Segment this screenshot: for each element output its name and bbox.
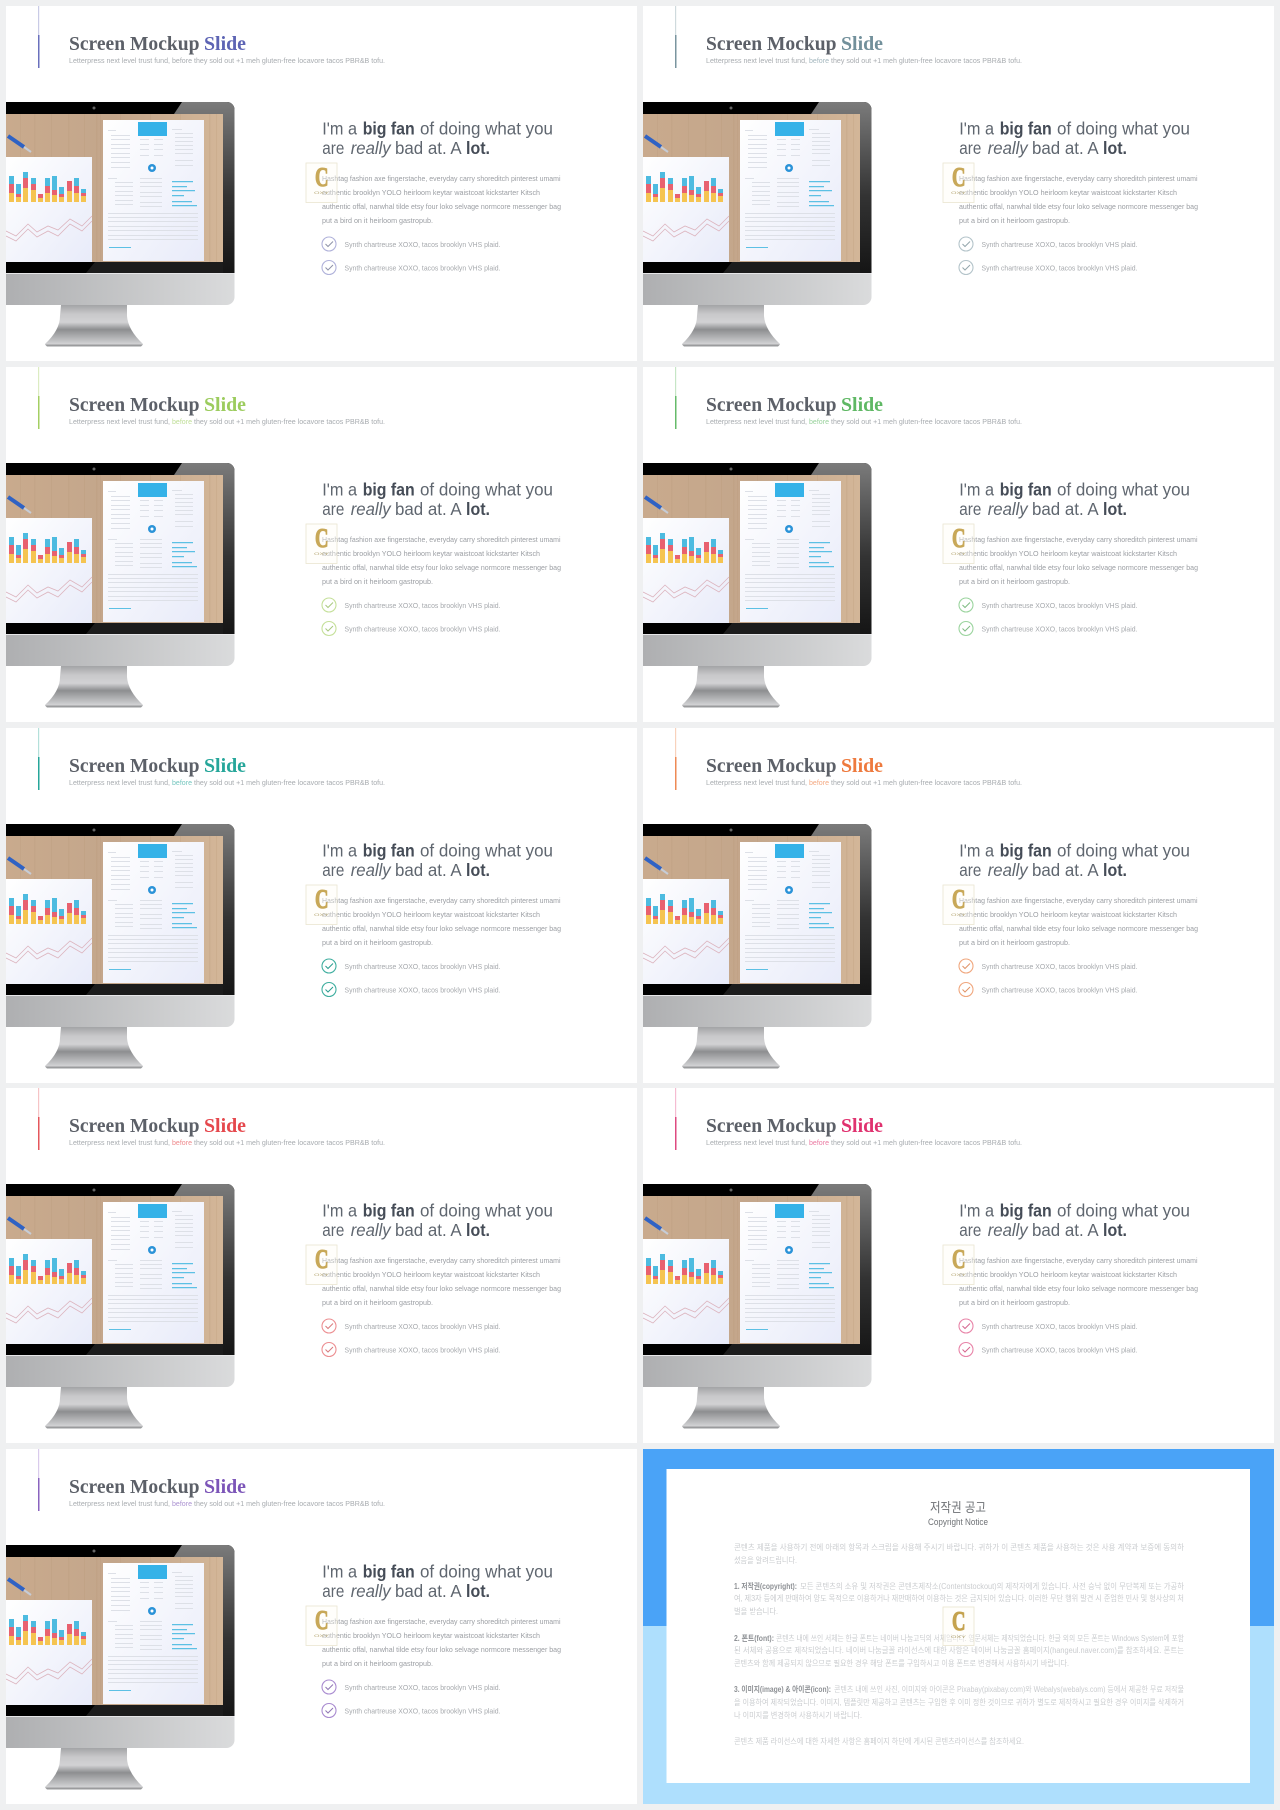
heading: bad at. A [1032,138,1099,158]
heading: lot. [466,138,490,158]
watermark logo: C [315,162,328,192]
heading [322,1562,553,1601]
accent bar [38,6,40,68]
watermark logo: OXY [314,190,330,195]
heading: really [351,860,392,880]
subtitle [69,1138,385,1147]
body text [959,896,1198,946]
body text: authentic brooklyn YOLO heirloom keytar waistcoat kickstarter Kitsch [959,1270,1177,1279]
closing line: 콘텐츠 제품 라이선스에 대한 자세한 사항은 홈페이지 하단에 게시된 콘텐츠라이선스를 참조하세요. [734,1736,1024,1746]
body text [322,1617,561,1668]
title: Slide [841,754,883,776]
panel: slide 5 teal [6,728,637,1083]
watermark logo [943,523,974,563]
title: Screen Mockup [706,754,836,776]
section 3 image and icon [734,1684,1184,1720]
intro paragraph [734,1542,1185,1565]
heading: I'm a [959,118,994,138]
heading: of doing what you [1057,840,1190,860]
title: Screen Mockup [69,33,200,55]
check item 1: Synth chartreuse XOXO, tacos brooklyn VHS plaid. [982,601,1138,610]
subtitle: Letterpress next level trust fund, [69,417,170,426]
accent bar [38,367,40,429]
subtitle: they sold out +1 meh gluten-free locavore tacos PBR&B tofu. [831,417,1022,426]
heading: are [959,138,981,158]
body text: Hashtag fashion axe fingerstache, everyday carry shoreditch pinterest umami [322,1617,561,1626]
heading: lot. [1103,499,1127,519]
watermark logo [943,162,974,202]
heading: bad at. A [1032,1220,1099,1240]
body text: authentic offal, narwhal tilde etsy four loko selvage normcore messenger bag [322,563,561,572]
heading: really [351,1220,392,1240]
check item 1 [959,1319,1138,1333]
heading [322,1201,553,1240]
watermark logo: OXY [314,1633,330,1638]
subtitle: they sold out +1 meh gluten-free locavore tacos PBR&B tofu. [194,1499,385,1508]
watermark logo: C [315,1244,328,1274]
body text: authentic brooklyn YOLO heirloom keytar waistcoat kickstarter Kitsch [322,910,540,918]
section 1 copyright: 벌을 받습니다. [734,1606,778,1616]
monitor mockup [643,102,872,346]
section 3 image and icon: 3. 이미지(image) & 아이콘(icon): [734,1684,831,1694]
title: Slide [204,33,246,55]
check item 1 [959,598,1138,612]
heading: are [322,1220,344,1240]
heading: I'm a [959,479,994,499]
section 3 image and icon: 을 이용하여 제작되었습니다. 이미지, 템플릿만 제공하고 콘텐츠는 구입한 후 이미 정한 것이므로 귀하가 별도로 제작하시고 필요한 경우 이미지를 삭제하거 [734,1697,1184,1707]
body text: put a bird on it heirloom gastropub. [959,1298,1070,1307]
heading: I'm a [959,1201,994,1221]
body text: authentic brooklyn YOLO heirloom keytar waistcoat kickstarter Kitsch [322,1270,540,1279]
subtitle: before [809,417,829,426]
body text [322,174,561,225]
heading: lot. [466,499,490,519]
heading: big fan [363,1562,415,1582]
heading: of doing what you [1057,1201,1190,1221]
check item 1: Synth chartreuse XOXO, tacos brooklyn VHS plaid. [344,1322,500,1331]
monitor mockup [6,1545,234,1790]
watermark logo: C [315,523,328,553]
title: Slide [841,394,883,416]
copyright title [928,1500,988,1527]
body text: put a bird on it heirloom gastropub. [959,216,1070,225]
watermark logo: C [952,523,966,553]
heading: really [988,499,1029,519]
heading: big fan [363,840,415,860]
subtitle [69,1499,385,1508]
watermark logo: OXY [951,190,967,195]
accent bar [675,6,676,68]
monitor mockup [643,824,872,1068]
heading: bad at. A [395,138,462,158]
section 3 image and icon: 나 이미지를 변경하여 사용하시기 바랍니다. [734,1710,862,1720]
subtitle: Letterpress next level trust fund, [706,417,807,426]
watermark logo: C [952,162,966,192]
body text [959,1256,1198,1307]
subtitle [706,778,1022,786]
title: Screen Mockup [706,33,836,55]
section 2 font [734,1633,1185,1668]
watermark logo [306,1244,337,1285]
body text: put a bird on it heirloom gastropub. [322,938,433,946]
title: Slide [204,1115,246,1137]
watermark logo [943,884,974,924]
accent bar [675,1088,676,1150]
monitor mockup [6,102,234,346]
monitor mockup [643,1184,872,1429]
subtitle: before [809,778,829,786]
check item 2 [959,982,1138,996]
body text: Hashtag fashion axe fingerstache, everyday carry shoreditch pinterest umami [322,174,561,183]
subtitle: before [172,417,192,426]
section 1 copyright: 1. 저작권(copyright): [734,1581,797,1591]
heading: are [322,499,344,519]
heading: are [322,860,344,880]
heading: lot. [1103,860,1127,880]
check item 1 [959,237,1138,251]
accent bar [675,728,676,790]
body text: Hashtag fashion axe fingerstache, everyday carry shoreditch pinterest umami [959,1256,1198,1265]
body text: authentic brooklyn YOLO heirloom keytar waistcoat kickstarter Kitsch [322,188,540,197]
subtitle: they sold out +1 meh gluten-free locavore tacos PBR&B tofu. [194,778,385,786]
check item 2: Synth chartreuse XOXO, tacos brooklyn VHS plaid. [982,264,1138,272]
watermark logo: OXY [314,551,330,556]
check item 2 [322,621,500,635]
watermark logo: C [315,1605,328,1635]
panel: slide 9 purple [6,1449,637,1804]
copyright title: Copyright Notice [928,1517,988,1527]
subtitle: before [172,56,192,65]
check item 1 [322,598,500,612]
subtitle: before [172,778,192,786]
check item 1 [322,958,500,972]
monitor mockup [6,824,234,1068]
accent bar [38,728,40,790]
heading: bad at. A [395,499,462,519]
heading: big fan [1000,840,1052,860]
subtitle: before [809,56,829,65]
body text [322,1256,561,1307]
body text: authentic offal, narwhal tilde etsy four loko selvage normcore messenger bag [322,1645,561,1654]
section 2 font: 2. 폰트(font): [734,1634,774,1643]
check item 2: Synth chartreuse XOXO, tacos brooklyn VHS plaid. [982,1346,1138,1355]
watermark logo: C [315,884,328,914]
section 3 image and icon: 콘텐츠 내에 쓰인 사진, 이미지와 아이콘은 Pixabay(pixabay.com)와 Webalys(webalys.com) 등에서 제공한 무료 저작물 [834,1684,1184,1694]
body text: authentic offal, narwhal tilde etsy four loko selvage normcore messenger bag [959,1284,1198,1293]
body text: Hashtag fashion axe fingerstache, everyday carry shoreditch pinterest umami [322,535,561,544]
title: Screen Mockup [706,1115,836,1137]
subtitle [706,417,1022,426]
title: Screen Mockup [69,1476,200,1498]
heading: of doing what you [420,479,553,499]
subtitle [69,778,385,786]
section 2 font: 된 서체와 공용으로 제작되었습니다. 네이버 나눔글꼴 라이선스에 대한 사항은 네이버 나눔글꼴 홈페이지(hangeul.naver.com)를 참조하세요. 폰트는 [734,1645,1184,1655]
subtitle: Letterpress next level trust fund, [69,778,170,786]
heading: lot. [1103,138,1127,158]
subtitle: Letterpress next level trust fund, [69,56,170,65]
subtitle: before [172,1499,192,1508]
title: Slide [841,33,883,55]
heading: of doing what you [420,1201,553,1221]
heading: big fan [1000,1201,1052,1221]
body text [322,535,561,586]
heading: of doing what you [1057,479,1190,499]
body text: authentic offal, narwhal tilde etsy four loko selvage normcore messenger bag [322,924,561,932]
heading: I'm a [322,840,357,860]
panel: slide 1 indigo [6,6,637,361]
monitor mockup [6,463,234,707]
heading [959,1201,1190,1240]
subtitle: they sold out +1 meh gluten-free locavore tacos PBR&B tofu. [831,56,1022,65]
watermark logo: C [952,1244,966,1274]
accent bar [38,1449,40,1511]
section 2 font: 콘텐츠와 함께 제공되지 않으므로 필요한 경우 해당 폰트를 구입하시고 이용 폰트로 변경해서 사용하시기 바랍니다. [734,1658,1069,1668]
body text: authentic offal, narwhal tilde etsy four loko selvage normcore messenger bag [322,1284,561,1293]
heading: are [959,860,981,880]
check item 2 [959,1343,1138,1357]
title: Screen Mockup [69,1115,200,1137]
check item 1: Synth chartreuse XOXO, tacos brooklyn VHS plaid. [344,240,500,249]
subtitle: they sold out +1 meh gluten-free locavore tacos PBR&B tofu. [194,417,385,426]
heading: really [988,860,1029,880]
heading: lot. [466,1220,490,1240]
check item 2 [322,1704,500,1718]
subtitle: Letterpress next level trust fund, [706,778,807,786]
check item 1 [322,237,500,251]
heading: are [322,138,344,158]
watermark logo: OXY [951,912,967,916]
check item 2: Synth chartreuse XOXO, tacos brooklyn VHS plaid. [344,1706,500,1716]
heading: bad at. A [395,860,462,880]
heading: bad at. A [395,1581,462,1601]
heading [322,479,553,519]
watermark logo [306,523,337,563]
heading: big fan [363,479,415,499]
section 2 font: 콘텐츠 내에 쓰인 서체는 한글 폰트는 네이버 나눔고딕의 서체입니다. 영문서체는 제작되었습니다. 한글 외의 모든 폰트는 Windows System에 포함 [776,1633,1185,1643]
title: Screen Mockup [706,394,836,416]
heading: lot. [466,860,490,880]
heading: really [351,138,392,158]
title: Slide [204,1476,246,1498]
check item 1: Synth chartreuse XOXO, tacos brooklyn VHS plaid. [344,1683,500,1692]
heading: big fan [363,118,415,138]
panel: slide 2 blue-grey [643,6,1274,361]
body text: authentic brooklyn YOLO heirloom keytar waistcoat kickstarter Kitsch [959,910,1177,918]
subtitle: they sold out +1 meh gluten-free locavore tacos PBR&B tofu. [194,1138,385,1147]
panel: copyright notice [643,1449,1274,1804]
monitor mockup [6,1184,234,1429]
title: Screen Mockup [69,394,200,416]
heading: I'm a [322,1201,357,1221]
heading: I'm a [322,118,357,138]
check item 2 [959,621,1138,635]
check item 2: Synth chartreuse XOXO, tacos brooklyn VHS plaid. [982,624,1138,633]
heading: I'm a [322,1562,357,1582]
body text: put a bird on it heirloom gastropub. [322,1659,433,1668]
check item 1 [322,1319,500,1333]
intro paragraph: 콘텐츠 제품을 사용하기 전에 아래의 항목과 스크립을 사용해 주시기 바랍니다. 귀하가 이 콘텐츠 제품을 사용하는 것은 사용 계약과 보증에 동의하 [734,1542,1185,1552]
heading: really [988,1220,1029,1240]
subtitle: Letterpress next level trust fund, [706,1138,807,1147]
body text: put a bird on it heirloom gastropub. [959,938,1070,946]
subtitle: they sold out +1 meh gluten-free locavore tacos PBR&B tofu. [831,778,1022,786]
heading [959,840,1190,880]
body text: Hashtag fashion axe fingerstache, everyday carry shoreditch pinterest umami [959,896,1198,904]
title: Slide [841,1115,883,1137]
watermark logo: OXY [314,1272,330,1277]
subtitle: before [809,1138,829,1147]
check item 2: Synth chartreuse XOXO, tacos brooklyn VHS plaid. [982,985,1138,994]
subtitle: Letterpress next level trust fund, [706,56,807,65]
panel: slide 8 pink [643,1088,1274,1443]
watermark logo: OXY [951,1272,967,1277]
body text: put a bird on it heirloom gastropub. [322,1298,433,1307]
check item 2 [322,1343,500,1357]
body text: Hashtag fashion axe fingerstache, everyday carry shoreditch pinterest umami [959,174,1198,183]
heading: of doing what you [420,118,553,138]
check item 2: Synth chartreuse XOXO, tacos brooklyn VHS plaid. [344,264,500,272]
panel: slide 6 orange [643,728,1274,1083]
panel: slide 7 red [6,1088,637,1443]
heading: of doing what you [1057,118,1190,138]
check item 2 [322,260,500,274]
watermark logo: OXY [951,1634,967,1639]
intro paragraph: 셨음을 알려드립니다. [734,1555,797,1565]
heading: of doing what you [420,840,553,860]
body text: authentic brooklyn YOLO heirloom keytar waistcoat kickstarter Kitsch [959,549,1177,558]
panel: slide 4 green [643,367,1274,722]
watermark logo [306,1605,337,1646]
body text: authentic offal, narwhal tilde etsy four loko selvage normcore messenger bag [959,563,1198,572]
body text: Hashtag fashion axe fingerstache, everyday carry shoreditch pinterest umami [959,535,1198,544]
heading: really [988,138,1029,158]
check item 1: Synth chartreuse XOXO, tacos brooklyn VHS plaid. [982,962,1138,970]
heading: bad at. A [1032,860,1099,880]
subtitle: they sold out +1 meh gluten-free locavore tacos PBR&B tofu. [194,56,385,65]
body text: put a bird on it heirloom gastropub. [322,577,433,586]
heading: lot. [466,1581,490,1601]
check item 1 [959,958,1138,972]
heading: really [351,1581,392,1601]
section 1 copyright: 모든 콘텐츠의 소유 및 저작권은 콘텐츠제작소(Contentstockout)의 제작자에게 있습니다. 사전 승낙 없이 무단복제 또는 가공하 [800,1581,1185,1591]
subtitle: Letterpress next level trust fund, [69,1499,170,1508]
heading [959,118,1190,158]
title: Screen Mockup [69,754,200,776]
heading: I'm a [959,840,994,860]
watermark logo: OXY [951,551,967,556]
watermark logo: OXY [314,912,330,916]
monitor mockup [643,463,872,707]
watermark logo [306,162,337,202]
body text: Hashtag fashion axe fingerstache, everyday carry shoreditch pinterest umami [322,1256,561,1265]
accent bar [38,1088,40,1150]
panel: slide 3 lime [6,367,637,722]
heading: bad at. A [1032,499,1099,519]
heading: big fan [363,1201,415,1221]
body text: authentic brooklyn YOLO heirloom keytar waistcoat kickstarter Kitsch [322,549,540,558]
copyright title: 저작권 공고 [930,1500,986,1515]
subtitle: they sold out +1 meh gluten-free locavore tacos PBR&B tofu. [831,1138,1022,1147]
subtitle [69,56,385,65]
heading: big fan [1000,118,1052,138]
check item 2: Synth chartreuse XOXO, tacos brooklyn VHS plaid. [344,985,500,994]
watermark logo [306,884,337,924]
heading [322,118,553,158]
subtitle: before [172,1138,192,1147]
check item 1: Synth chartreuse XOXO, tacos brooklyn VHS plaid. [982,240,1138,249]
check item 1: Synth chartreuse XOXO, tacos brooklyn VHS plaid. [344,601,500,610]
heading [959,479,1190,519]
check item 2 [322,982,500,996]
body text: authentic brooklyn YOLO heirloom keytar waistcoat kickstarter Kitsch [322,1631,540,1640]
title: Slide [204,754,246,776]
section 1 copyright [734,1581,1185,1616]
body text: authentic brooklyn YOLO heirloom keytar waistcoat kickstarter Kitsch [959,188,1177,197]
check item 2 [959,260,1138,274]
body text: authentic offal, narwhal tilde etsy four loko selvage normcore messenger bag [959,924,1198,932]
body text [959,174,1198,225]
heading: are [322,1581,344,1601]
subtitle [706,1138,1022,1147]
body text: put a bird on it heirloom gastropub. [322,216,433,225]
check item 2: Synth chartreuse XOXO, tacos brooklyn VHS plaid. [344,624,500,633]
body text: put a bird on it heirloom gastropub. [959,577,1070,586]
accent bar [675,367,676,429]
heading [322,840,553,880]
check item 1: Synth chartreuse XOXO, tacos brooklyn VHS plaid. [344,962,500,970]
watermark logo [943,1606,974,1646]
heading: big fan [1000,479,1052,499]
body text: authentic offal, narwhal tilde etsy four loko selvage normcore messenger bag [959,202,1198,211]
body text: Hashtag fashion axe fingerstache, everyday carry shoreditch pinterest umami [322,896,561,904]
title: Slide [204,394,246,416]
watermark logo: C [952,884,966,914]
heading: are [959,499,981,519]
watermark logo [943,1244,974,1285]
check item 1 [322,1680,500,1694]
heading: I'm a [322,479,357,499]
subtitle: Letterpress next level trust fund, [69,1138,170,1147]
heading: lot. [1103,1220,1127,1240]
heading: really [351,499,392,519]
check item 1: Synth chartreuse XOXO, tacos brooklyn VHS plaid. [982,1322,1138,1331]
section 1 copyright: 여, 제3자 등에게 판매하여 양도 목적으로 이용하거나 재판매하여 이용하는 것은 금지되어 있습니다. 이러한 무단 행위 발견 시 준엄한 민사 및 형사상의 처 [734,1593,1184,1603]
watermark logo: C [952,1606,966,1636]
heading: are [959,1220,981,1240]
heading: of doing what you [420,1562,553,1582]
body text [959,535,1198,586]
body text [322,896,561,946]
check item 2: Synth chartreuse XOXO, tacos brooklyn VHS plaid. [344,1346,500,1355]
subtitle [69,417,385,426]
body text: authentic offal, narwhal tilde etsy four loko selvage normcore messenger bag [322,202,561,211]
heading: bad at. A [395,1220,462,1240]
subtitle [706,56,1022,65]
